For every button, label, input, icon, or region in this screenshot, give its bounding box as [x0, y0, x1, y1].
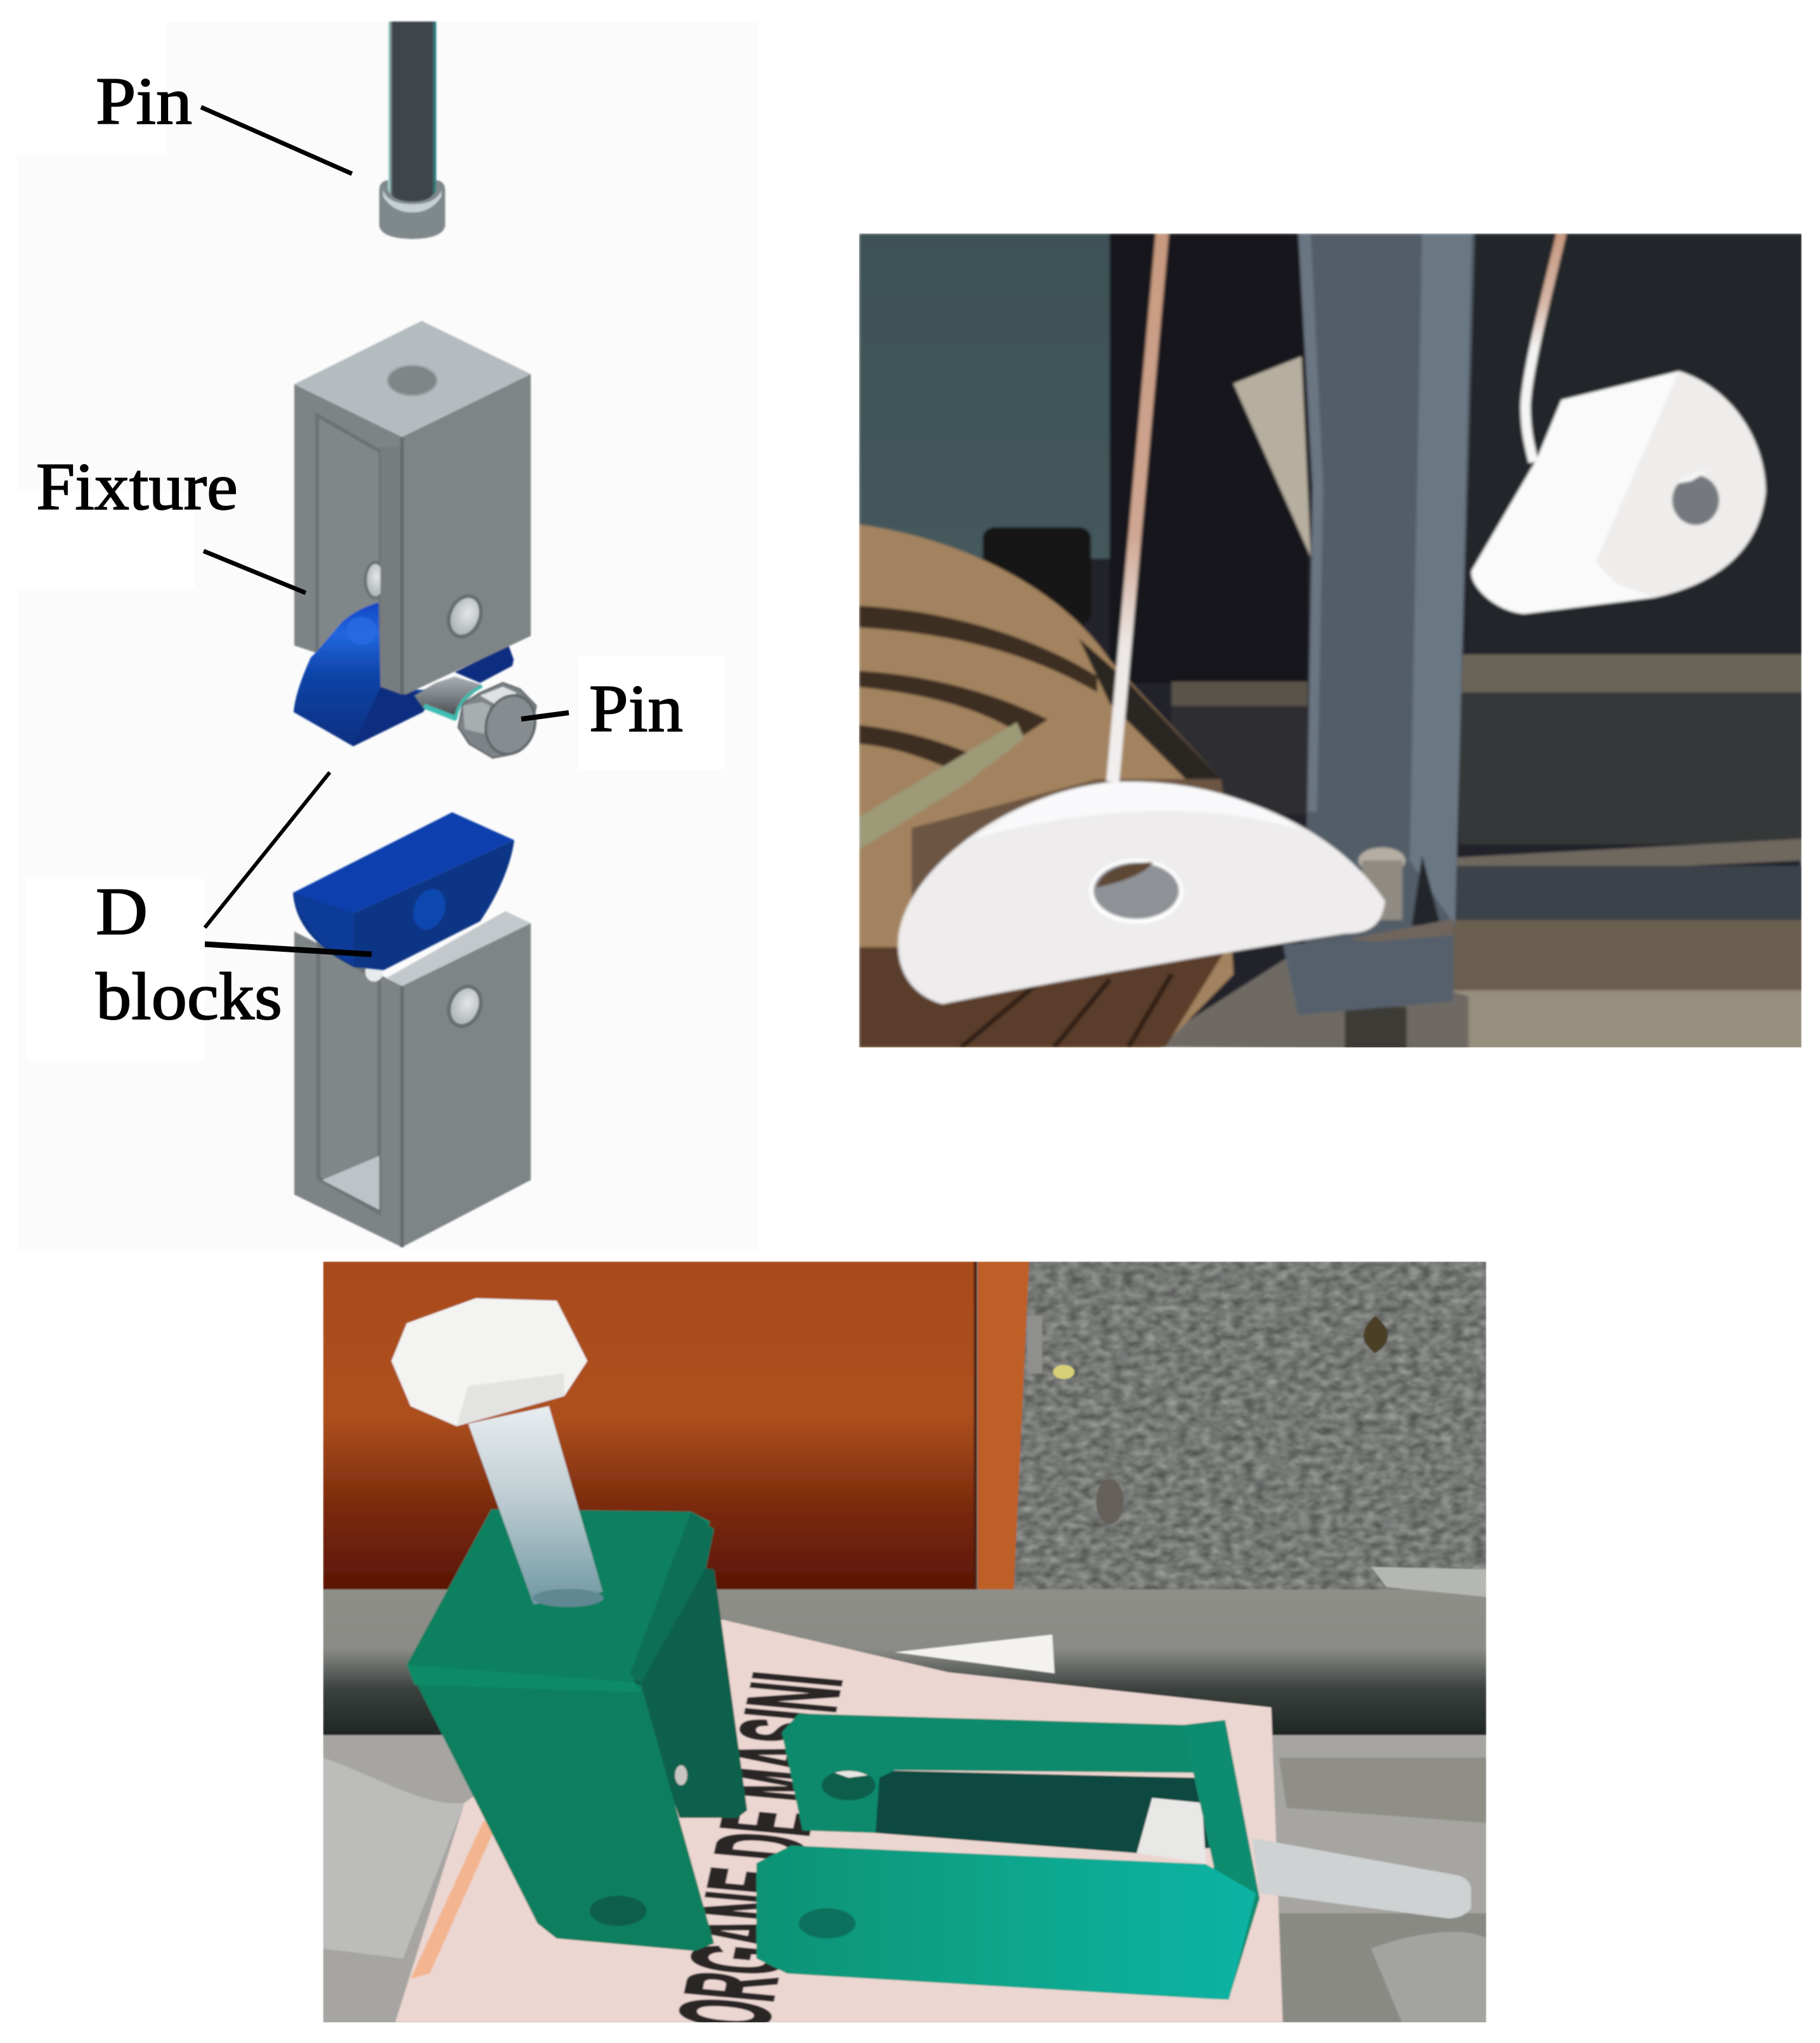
leader line: side pin	[521, 713, 569, 719]
icon: upper D block	[294, 602, 514, 746]
bolt in left fixture	[391, 1298, 604, 1607]
plastic wrapped bars	[323, 1590, 1486, 1737]
right green fixture	[757, 1713, 1471, 2000]
wire left	[1113, 233, 1162, 782]
icon: upper fixture	[294, 321, 531, 746]
photo: green painted fixtures with white D blocks and bolts: ORGANE DE MAȘINI	[652, 1668, 871, 2034]
grey steel column	[1298, 233, 1475, 947]
label: D blocks: D	[96, 874, 148, 949]
icon: lower fixture	[294, 911, 531, 1247]
icon: lower D block	[293, 812, 514, 970]
panel: CAD exploded view of the fixture	[0, 22, 759, 1249]
leader line: lower D block	[205, 944, 372, 954]
wooden cabinet	[323, 1262, 976, 1603]
label: D blocks	[96, 874, 282, 1034]
white D block, large	[898, 782, 1385, 1004]
gravel floor	[1014, 1262, 1486, 1593]
photo: two white D blocks hanging on wires	[859, 233, 1803, 1050]
label: Pin (side): Pin	[589, 671, 683, 746]
label: D blocks: blocks	[96, 959, 282, 1034]
wooden cable drum	[859, 524, 1233, 1050]
leader line: upper D block	[205, 772, 330, 928]
white D block, tilted	[1469, 369, 1681, 616]
leader line: top pin	[201, 107, 352, 174]
paper book	[395, 1619, 1283, 2022]
icon: horizontal hex-head bolt	[414, 677, 543, 760]
left green fixture	[406, 1509, 747, 1951]
label: Fixture: Fixture	[36, 450, 238, 524]
label: Pin (top): Pin	[96, 64, 192, 138]
pale board behind column	[1233, 356, 1311, 557]
icon: vertical pin with cap head	[379, 22, 445, 239]
photo: green painted fixtures with white D blocks and bolts	[323, 1262, 1486, 2034]
wire right	[1526, 233, 1561, 462]
leader line: fixture	[204, 551, 306, 593]
